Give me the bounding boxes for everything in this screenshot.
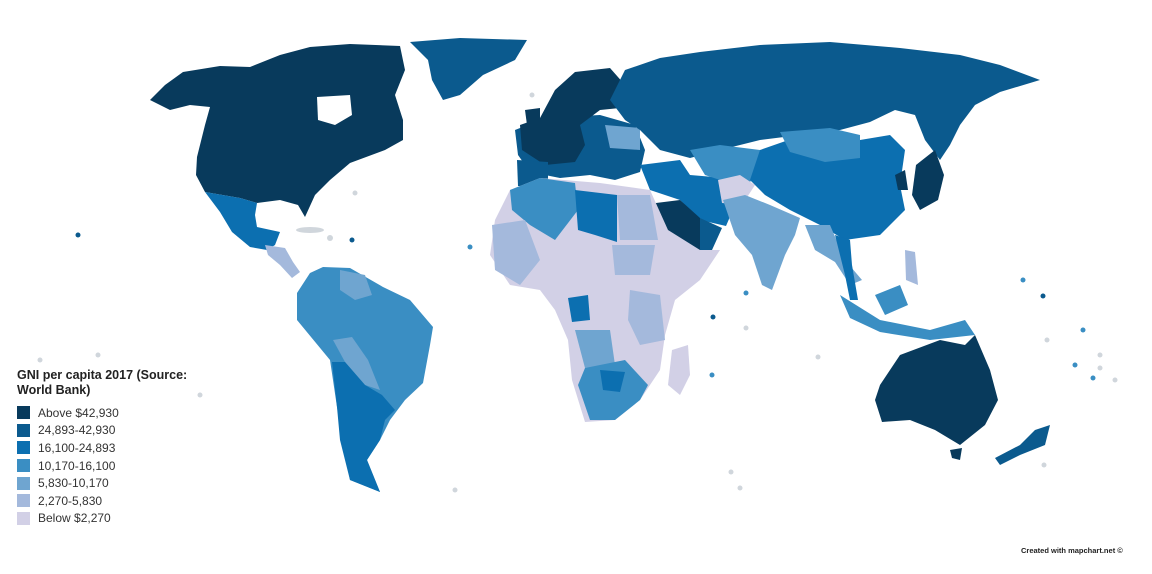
legend rows: Below $2,270 (38, 511, 111, 525)
legend (17, 368, 187, 525)
south america (297, 267, 433, 492)
legend rows: 2,270-5,830 (38, 494, 102, 508)
central america (265, 245, 300, 278)
legend title: World Bank) (17, 383, 90, 397)
new zealand (995, 425, 1050, 465)
africa (490, 178, 720, 422)
small islands (38, 92, 1118, 492)
caribbean islands (296, 227, 333, 241)
japan and korea (895, 150, 944, 210)
legend rows (17, 406, 119, 525)
southeast asia (805, 225, 975, 340)
china and mongolia (750, 128, 905, 240)
legend title (17, 368, 187, 397)
legend rows: Above $42,930 (38, 406, 119, 420)
legend rows: 10,170-16,100 (38, 459, 115, 473)
legend rows: 5,830-10,170 (38, 476, 109, 490)
legend rows: 24,893-42,930 (38, 423, 115, 437)
credit: Created with mapchart.net © (1021, 546, 1123, 555)
europe (515, 68, 645, 186)
greenland (410, 38, 527, 100)
australia (875, 335, 998, 460)
russia (610, 42, 1040, 160)
legend rows: 16,100-24,893 (38, 441, 115, 455)
mexico (205, 192, 280, 250)
middle east and central asia (640, 145, 765, 258)
legend title: GNI per capita 2017 (Source: (17, 368, 187, 382)
south asia (723, 195, 800, 290)
north america: canada and usa (150, 44, 405, 217)
